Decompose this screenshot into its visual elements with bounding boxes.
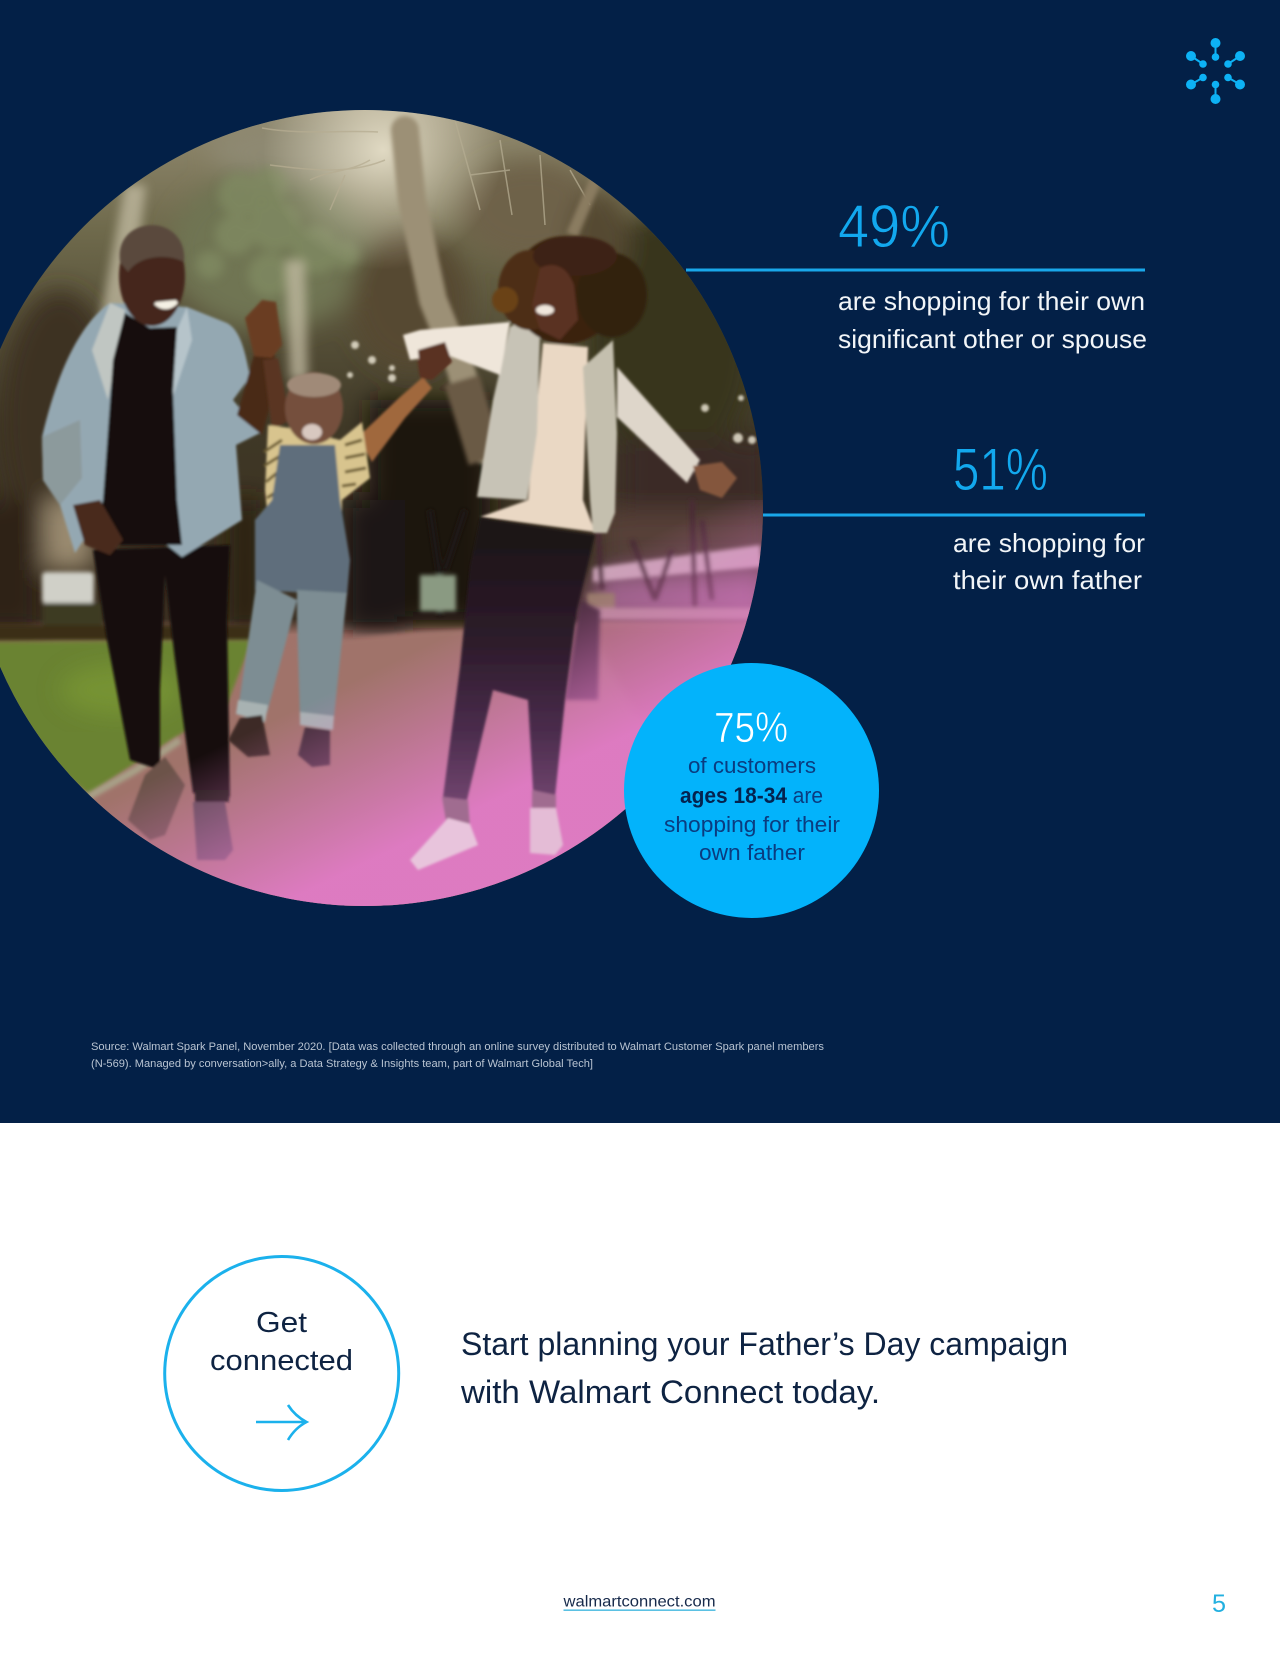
button label: Get bbox=[256, 1307, 307, 1339]
woman's curly hair bbox=[492, 236, 647, 344]
man bbox=[42, 225, 282, 860]
shadow under woman's tree bbox=[565, 600, 600, 700]
heading: call to action bbox=[460, 1326, 1068, 1410]
callout: 75% blue circle bbox=[624, 663, 879, 918]
callout text: ages 18-34 are bbox=[680, 783, 823, 808]
sun rays bbox=[100, 185, 308, 380]
button: Get connected circle bbox=[165, 1256, 399, 1490]
description: 51% stat: are shopping for bbox=[953, 528, 1145, 558]
foliage clusters bbox=[196, 167, 359, 297]
line: 49% connector bbox=[686, 268, 1145, 272]
button label: connected bbox=[210, 1345, 353, 1377]
path and ground bbox=[90, 622, 780, 920]
callout text: own father bbox=[699, 840, 805, 865]
number: 51%: 51% bbox=[953, 436, 1048, 503]
footer link: walmartconnect.com: walmartconnect.com bbox=[562, 1594, 716, 1610]
description: 51% stat bbox=[953, 528, 1145, 595]
heading: call to action: Start planning your Father’s Day campaign bbox=[461, 1326, 1068, 1362]
callout text: of customers bbox=[688, 753, 816, 778]
far wall and trees on the right bbox=[420, 500, 765, 620]
background trees and haze bbox=[0, 120, 770, 630]
branches bbox=[262, 120, 590, 225]
grass bbox=[0, 640, 250, 795]
child bbox=[228, 340, 450, 767]
callout text bbox=[664, 753, 840, 865]
source note bbox=[91, 1041, 825, 1070]
cars and bushes on the left bbox=[0, 572, 260, 641]
bokeh highlights bbox=[347, 341, 756, 444]
description: 51% stat: their own father bbox=[953, 565, 1142, 595]
description: 49% stat: significant other or spouse bbox=[838, 324, 1147, 354]
callout text: shopping for their bbox=[664, 812, 840, 837]
heading: call to action: with Walmart Connect today. bbox=[460, 1374, 880, 1410]
woman's jeans and sneakers above the overlay bbox=[410, 518, 595, 870]
description: 49% stat bbox=[838, 286, 1147, 354]
panel: white call to action area bbox=[0, 1123, 1280, 1656]
pink gradient overlay bbox=[114, 500, 763, 906]
number: 49%: 49% bbox=[838, 193, 950, 260]
page number: 5 bbox=[1212, 1590, 1226, 1618]
woman bbox=[403, 236, 737, 533]
line: 51% connector bbox=[763, 514, 1145, 516]
icon: arrow bbox=[256, 1405, 306, 1440]
tree trunk bbox=[405, 130, 600, 460]
description: 49% stat: are shopping for their own bbox=[838, 286, 1145, 316]
button label bbox=[210, 1307, 353, 1377]
photo: family walking in a park, circular crop bbox=[0, 100, 780, 920]
stat: 51% bbox=[953, 436, 1145, 595]
source note: Source: Walmart Spark Panel, November 2020. [Data was collected through an online survey distributed to Walmart Customer Spark panel members bbox=[91, 1041, 825, 1053]
panel: dark navy background bbox=[0, 0, 1280, 1123]
icon: Walmart Connect network spark bbox=[1186, 38, 1245, 104]
stat: 49% bbox=[838, 193, 1147, 354]
source note: (N-569). Managed by conversation>ally, a Data Strategy & Insights team, part of Walmart Global Tech] bbox=[91, 1058, 593, 1070]
number: 75%: 75% bbox=[714, 704, 788, 752]
